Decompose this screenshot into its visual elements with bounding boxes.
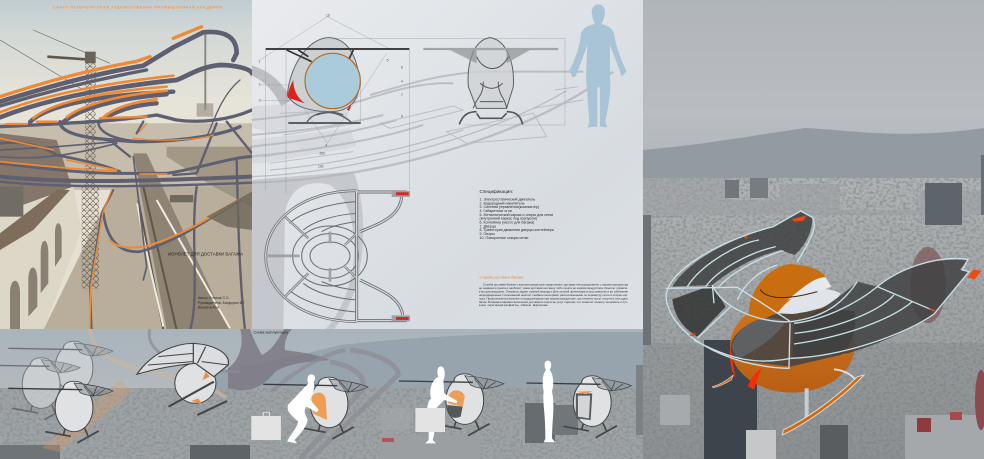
construction lines: [260, 17, 565, 193]
panel: left station photo: [0, 0, 252, 330]
callout numbers: 1: [259, 60, 261, 64]
net of slate tubes: [0, 32, 252, 330]
panel: right city photo: [643, 0, 984, 459]
callout numbers: 100: [318, 164, 324, 168]
sky: [643, 26, 984, 150]
text block: specification: 10. Поворотные секции сетки: [480, 236, 528, 240]
distant towers and lattice masts: [0, 30, 213, 288]
side view: [423, 38, 558, 124]
text block: specification: 1. Электростатический двигатель: [480, 198, 535, 202]
text block: service description: непредвиденных столкновений ионолет снабжен сенсорами, расположенными по периметру сетки и опорах кор-: [479, 293, 628, 297]
wing frame lines: [666, 211, 969, 368]
text block: service description: [479, 282, 628, 307]
sky: [0, 382, 174, 388]
authors: Руководители: Бандорин В.Г.: [198, 301, 245, 305]
academy title: САНКТ-ПЕТЕРБУРГСКАЯ ХУДОЖЕСТВЕННО-ПРОМЫШЛЕННАЯ АКАДЕМИЯ: [53, 5, 222, 9]
platform: [43, 187, 252, 330]
ghost trunk: [228, 329, 330, 390]
drawing: front, side and plan views: [259, 4, 627, 322]
vehicles: rear ghost pair: [0, 341, 113, 420]
text block: specification: 4. Габаритные огни: [480, 209, 512, 213]
callout numbers: 9: [401, 114, 403, 118]
callout numbers: 4: [401, 80, 403, 84]
callout numbers: 4: [325, 144, 327, 148]
text block: service description: багаж. Возможен вариант включения доставки в перечень услуг ларьков, что позволит клиенту экономить и луч-: [479, 300, 628, 304]
vehicle: with deployed net: [137, 343, 228, 415]
illustration: iono-craft with net wings over the city: [666, 211, 981, 435]
text block: specification: 7. Дверца: [480, 224, 496, 228]
callout numbers: [259, 14, 403, 168]
text block: specification: 6. Контейнер (место для багажа): [480, 220, 534, 224]
wing: right: [792, 259, 969, 358]
dark shade under net: [207, 192, 252, 230]
cityscape: [643, 155, 984, 459]
mountains: [643, 128, 984, 178]
wing: rear left: [672, 212, 812, 287]
heading: baggage delivery service: Служба доставки багажа: [480, 276, 524, 280]
skids: [712, 369, 864, 435]
panel: bottom usage strip: [0, 329, 643, 459]
text block: specification: 2. Водородный накопитель: [480, 201, 525, 205]
authors: Вешатов В.Н.: [198, 306, 220, 310]
authors: [198, 296, 245, 308]
red wing markers: [689, 215, 981, 337]
text block: specification: 5. Металлический каркас и опоры для сетки: [480, 213, 553, 217]
orange ghost fan: [42, 380, 132, 452]
text block: specification: 3. Система управления(компьютер): [480, 205, 539, 209]
mountains: [215, 332, 643, 388]
text block: specification: [480, 189, 554, 240]
callout numbers: 260: [319, 152, 325, 156]
scene: person loading the suitcase: [399, 366, 504, 443]
station building: [0, 133, 252, 330]
text block: service description: пуса. Предполагается наличие площадок/парков при аэромоторедукторе, где клиенты могут получить или сдать: [479, 296, 628, 300]
wing: lower left sector: [672, 285, 726, 337]
city: [0, 365, 643, 459]
plan view: [266, 191, 407, 322]
project title: ИОНОЛЕТ ДЛЯ ДОСТАВКИ БАГАЖА: [168, 252, 243, 257]
group of vehicles in flight: [0, 341, 631, 443]
text block: service description: Служба доставки багажа с аэромоторедуктора предполагает доставку непосредственно с аэромоторедуктора: [483, 282, 628, 286]
text block: specification: Спецификация:: [480, 189, 513, 194]
railway tracks: [133, 153, 230, 330]
plan view: red markers: [396, 192, 409, 195]
callout numbers: 7: [401, 93, 403, 97]
sky and ground: [0, 0, 252, 330]
caption: usage scheme: Схема эксплуатации: [254, 330, 288, 334]
body: [730, 264, 855, 393]
human figure silhouette: [569, 4, 627, 127]
callout numbers: 10: [326, 14, 330, 18]
net of orange tubes: [0, 27, 239, 330]
panel: center technical drawing sheet: [250, 0, 643, 330]
text block: specification: (внутренний каркас под корпусом): [480, 217, 537, 221]
text block: service description: ше организовать свое время.: [479, 303, 549, 307]
callout numbers: 3: [259, 98, 261, 102]
callout numbers: 5: [387, 59, 389, 63]
callout numbers: 2: [259, 82, 261, 86]
text block: service description: до заданного пункта и наоборот; заказ доставки на смену либо пункта до аэромоторедуктора. Ионолет управля-: [479, 286, 628, 290]
text block: specification: 8. Траектория движения дверцы контейнера: [480, 228, 554, 232]
scene: person lifting the suitcase: [251, 374, 368, 443]
ghost net wing shadow: [250, 65, 613, 330]
scene: person beside the closed vehicle: [526, 361, 631, 442]
callout numbers: 6: [401, 66, 403, 70]
vehicle: front: [8, 381, 113, 443]
text block: specification: 9. Опоры: [480, 232, 495, 236]
front view: [266, 38, 409, 123]
text block: service description: ется дистанционно. Оператор задает нужный маршрут. Для лучшей ориентации в пространстве и во избежание: [479, 290, 628, 294]
authors: Автор: Блинов С.С.: [198, 296, 230, 300]
